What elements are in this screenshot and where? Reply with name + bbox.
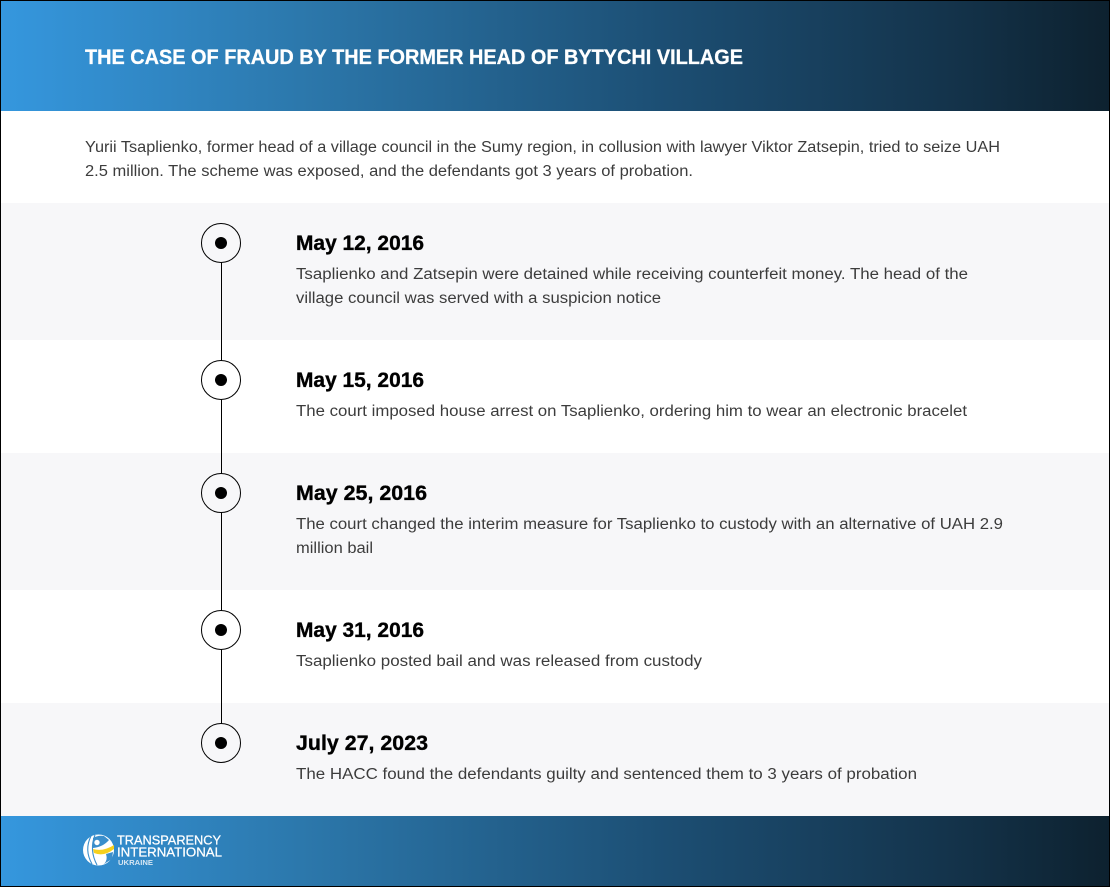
intro text: 2.5 million. The scheme was exposed, and the defendants got 3 years of probation. xyxy=(85,163,693,180)
event: May 31, 2016: Tsaplienko posted bail and was released from custody xyxy=(296,653,702,670)
panel: row 1 background xyxy=(1,203,1109,340)
event: May 12, 2016: Tsaplienko and Zatsepin were detained while receiving counterfeit money. The head of the xyxy=(296,266,968,283)
event: May 25, 2016: May 25, 2016 xyxy=(296,482,427,505)
event: July 27, 2023: The HACC found the defendants guilty and sentenced them to 3 years of probation xyxy=(296,766,917,783)
event: July 27, 2023 xyxy=(296,732,917,783)
logo: Transparency International Ukraine: TRANSPARENCY xyxy=(117,834,222,848)
header banner xyxy=(1,1,1109,111)
timeline marker: July 27, 2023 xyxy=(202,724,240,762)
timeline connector line xyxy=(220,243,222,743)
panel: row 3 background xyxy=(1,453,1109,590)
event: May 25, 2016: The court changed the interim measure for Tsaplienko to custody with an alternative of UAH 2.9 xyxy=(296,516,1003,533)
footer banner xyxy=(1,816,1109,886)
event: May 12, 2016: village council was served with a suspicion notice xyxy=(296,290,661,307)
event: July 27, 2023: July 27, 2023 xyxy=(296,732,428,755)
event: May 15, 2016: The court imposed house arrest on Tsaplienko, ordering him to wear an electronic bracelet xyxy=(296,403,968,420)
intro text: Yurii Tsaplienko, former head of a village council in the Sumy region, in collusion with lawyer Viktor Zatsepin, tried to seize UAH xyxy=(85,139,1000,156)
event: May 25, 2016: million bail xyxy=(296,540,373,557)
panel: row 5 background xyxy=(1,703,1109,816)
icon: logo globe xyxy=(83,834,114,866)
event: May 31, 2016 xyxy=(296,619,702,670)
event: May 15, 2016: May 15, 2016 xyxy=(296,369,424,392)
timeline marker: May 25, 2016 xyxy=(202,474,240,512)
timeline marker: May 15, 2016 xyxy=(202,360,240,400)
logo: Transparency International Ukraine xyxy=(83,834,222,867)
event: May 31, 2016: May 31, 2016 xyxy=(296,619,424,642)
event: May 12, 2016 xyxy=(296,232,968,307)
timeline marker: May 12, 2016 xyxy=(202,224,240,262)
logo: Transparency International Ukraine: UKRAINE xyxy=(118,860,153,867)
event: May 15, 2016 xyxy=(296,369,968,420)
timeline marker: May 31, 2016 xyxy=(202,610,240,650)
title: THE CASE OF FRAUD BY THE FORMER HEAD OF BYTYCHI VILLAGE xyxy=(85,46,743,69)
event: May 12, 2016: May 12, 2016 xyxy=(296,232,424,255)
logo: Transparency International Ukraine: INTERNATIONAL xyxy=(117,846,222,860)
intro text xyxy=(85,139,1000,180)
event: May 25, 2016 xyxy=(296,482,1003,557)
